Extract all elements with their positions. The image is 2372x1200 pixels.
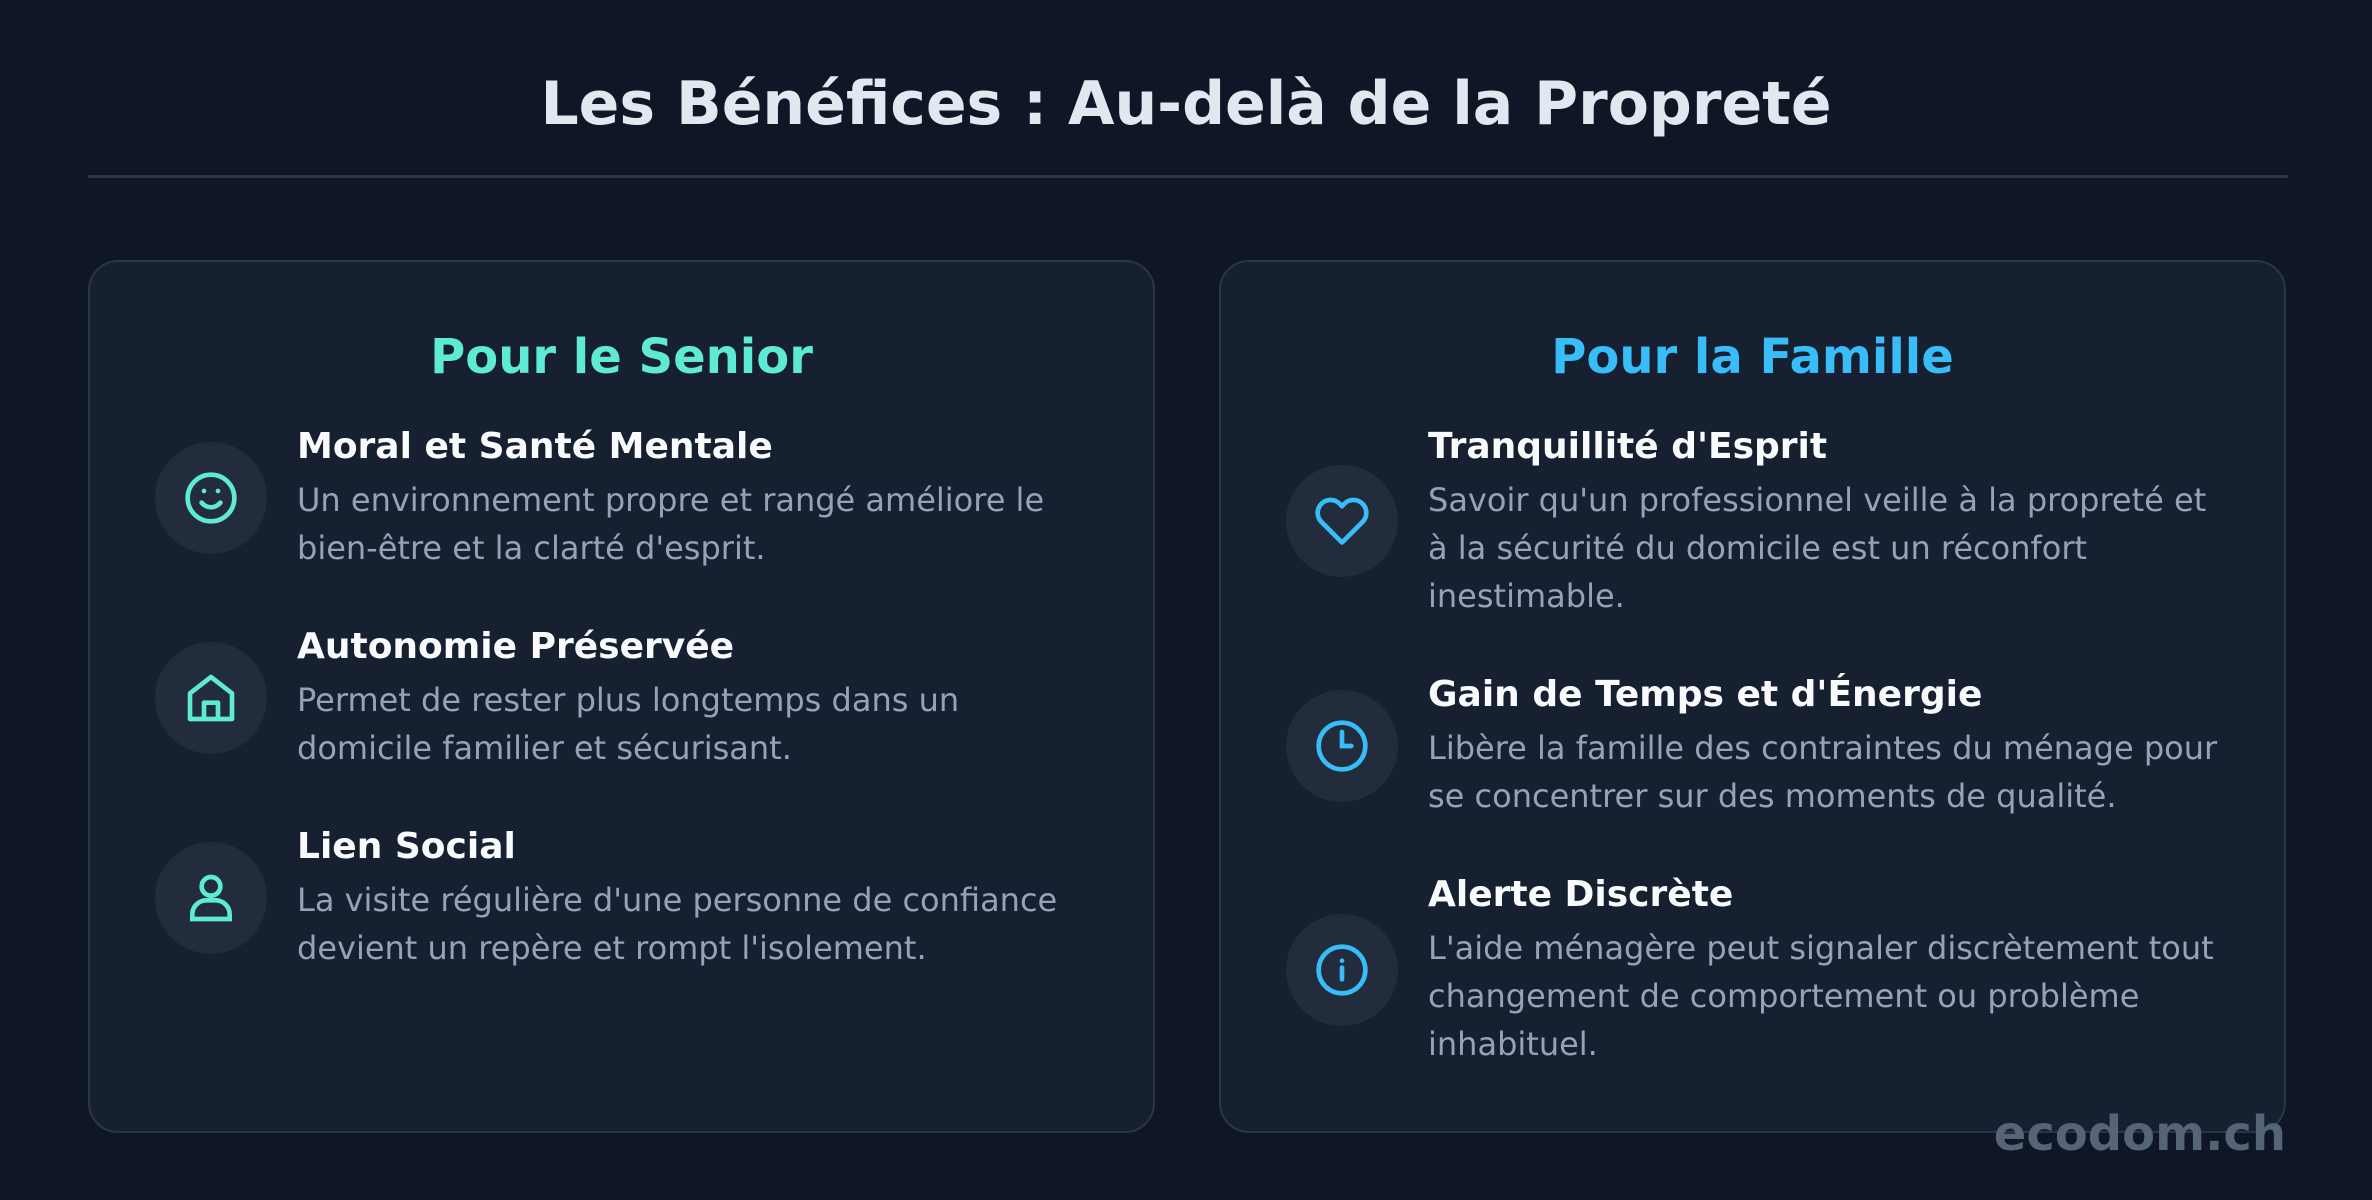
item: gain de temps <box>1286 673 2218 815</box>
item: moral: Un environnement propre et rangé améliore le <box>297 481 1044 519</box>
item: autonomie <box>155 626 959 767</box>
item: gain de temps: se concentrer sur des moments de qualité. <box>1428 777 2117 815</box>
item: alerte <box>1286 874 2214 1063</box>
item: lien social: devient un repère et rompt l'isolement. <box>297 929 927 967</box>
item: autonomie: Permet de rester plus longtemps dans un <box>297 681 959 719</box>
title: Les Bénéfices : Au-delà de la Propreté <box>540 69 1832 139</box>
icon: clock <box>1286 690 1398 802</box>
item: moral: bien-être et la clarté d'esprit. <box>297 529 766 567</box>
icon: heart <box>1286 465 1398 577</box>
item: moral: Moral et Santé Mentale <box>297 426 773 467</box>
icon: info <box>1286 914 1398 1026</box>
item: lien social: Lien Social <box>297 826 516 867</box>
icon: person <box>155 842 267 954</box>
item: alerte: Alerte Discrète <box>1428 874 1733 915</box>
icon: house <box>155 642 267 754</box>
item: moral <box>155 426 1044 567</box>
item: tranquillite: Tranquillité d'Esprit <box>1428 426 1827 467</box>
heading: famille: Pour la Famille <box>1551 329 1954 385</box>
item: alerte: L'aide ménagère peut signaler discrètement tout <box>1428 929 2214 967</box>
item: lien social <box>155 826 1057 967</box>
watermark: ecodom.ch <box>1994 1106 2286 1162</box>
item: alerte: changement de comportement ou problème <box>1428 977 2139 1015</box>
item: tranquillite: Savoir qu'un professionnel veille à la propreté et <box>1428 481 2206 519</box>
item: gain de temps: Libère la famille des contraintes du ménage pour <box>1428 729 2217 767</box>
panel: famille <box>1219 260 2286 1133</box>
item: alerte: inhabituel. <box>1428 1025 1598 1063</box>
item: tranquillite: inestimable. <box>1428 577 1625 615</box>
item: tranquillite <box>1286 426 2206 615</box>
item: lien social: La visite régulière d'une personne de confiance <box>297 881 1057 919</box>
heading: senior: Pour le Senior <box>430 329 813 385</box>
panel: senior <box>88 260 1155 1133</box>
icon: smile <box>155 442 267 554</box>
item: autonomie: domicile familier et sécurisant. <box>297 729 792 767</box>
item: gain de temps: Gain de Temps et d'Énergie <box>1428 674 1982 715</box>
item: tranquillite: à la sécurité du domicile est un réconfort <box>1428 529 2087 567</box>
item: autonomie: Autonomie Préservée <box>297 626 734 667</box>
